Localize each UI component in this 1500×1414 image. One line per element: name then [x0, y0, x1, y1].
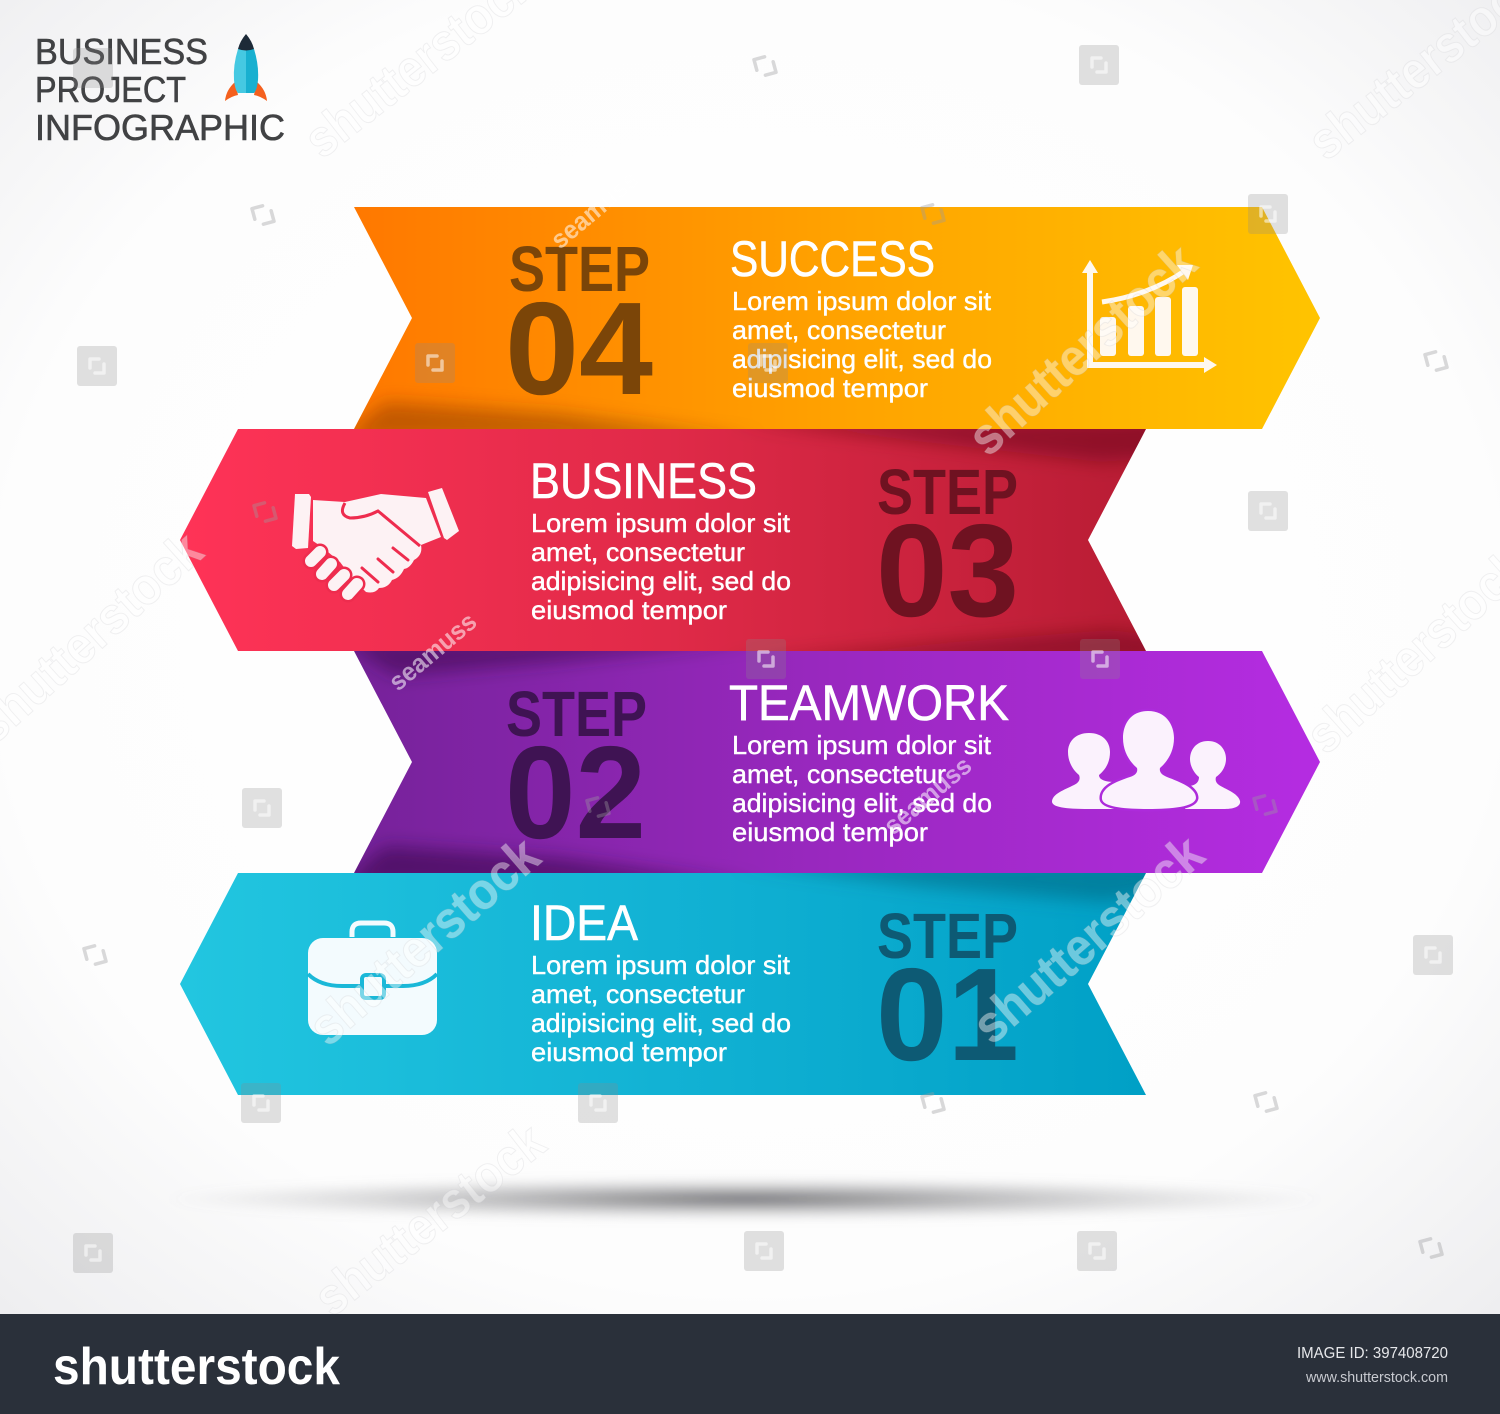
success text block: eiusmod tempor [732, 373, 928, 403]
icon: team of people [1052, 711, 1240, 809]
watermark overlay: shutterstock [962, 824, 1215, 1055]
watermark overlay: shutterstock [957, 233, 1208, 467]
idea text block: IDEA [530, 895, 639, 951]
heading: business project infographic [35, 31, 285, 148]
business text block: BUSINESS [530, 453, 757, 509]
website: www.shutterstock.com [1305, 1370, 1448, 1386]
step label 04: 04 [505, 275, 653, 422]
image id: IMAGE ID: 397408720 [1297, 1345, 1448, 1362]
success text block: SUCCESS [730, 231, 935, 287]
teamwork text block [729, 675, 1009, 847]
watermark overlay: seamuss [878, 750, 977, 841]
watermark overlay: seamuss [545, 164, 644, 255]
icon: handshake [292, 488, 459, 594]
idea text block: Lorem ipsum dolor sit [531, 950, 791, 980]
idea text block: eiusmod tempor [531, 1037, 727, 1067]
idea text block: amet, consectetur [531, 979, 745, 1009]
heading: business project infographic: BUSINESS [35, 31, 208, 72]
step label 01: STEP [877, 900, 1018, 972]
step label 02: 02 [505, 719, 646, 866]
success text block [730, 231, 992, 403]
teamwork text block: eiusmod tempor [732, 817, 928, 847]
business text block: amet, consectetur [531, 537, 745, 567]
business text block: adipisicing elit, sed do [531, 566, 791, 596]
panel: step 01 idea [180, 862, 1160, 1095]
business text block: Lorem ipsum dolor sit [531, 508, 791, 538]
step label 02: STEP [506, 678, 647, 750]
watermark overlay: seamuss [383, 606, 482, 697]
teamwork text block: adipisicing elit, sed do [732, 788, 992, 818]
icon: growth chart [1082, 260, 1217, 373]
step label 01: 01 [876, 941, 1019, 1088]
watermark overlay: shutterstock [304, 1112, 556, 1327]
icon: rocket [225, 34, 267, 101]
icon: briefcase [308, 923, 437, 1035]
footer logo: shutterstock [53, 1338, 340, 1396]
step label 04: STEP [509, 233, 650, 305]
idea text block: adipisicing elit, sed do [531, 1008, 791, 1038]
step label 03: 03 [876, 497, 1019, 644]
teamwork text block: TEAMWORK [729, 675, 1009, 731]
teamwork text block: Lorem ipsum dolor sit [732, 730, 992, 760]
panel: step 03 business [180, 420, 1160, 662]
success text block: adipisicing elit, sed do [732, 344, 992, 374]
idea text block [530, 895, 791, 1067]
panel: step 02 teamwork [354, 651, 1320, 873]
heading: business project infographic: PROJECT [35, 69, 186, 110]
step label 03: STEP [877, 456, 1018, 528]
watermark overlay: shutterstock [298, 826, 551, 1057]
teamwork text block: amet, consectetur [732, 759, 946, 789]
footer bar [0, 1314, 1500, 1414]
success text block: Lorem ipsum dolor sit [732, 286, 992, 316]
heading: business project infographic: INFOGRAPHIC [35, 107, 285, 148]
success text block: amet, consectetur [732, 315, 946, 345]
ground shadow [165, 1178, 1325, 1220]
business text block [530, 453, 791, 625]
panel: step 04 success [340, 207, 1320, 440]
business text block: eiusmod tempor [531, 595, 727, 625]
